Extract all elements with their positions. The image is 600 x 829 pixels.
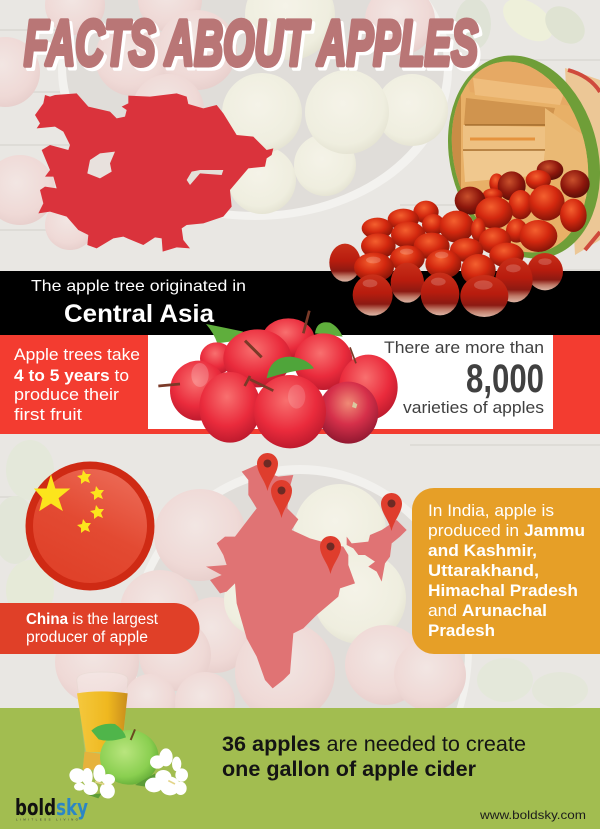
- logo: boldsky: LIMITLESS LIVING: [16, 818, 79, 822]
- pile of red apples: [329, 160, 590, 317]
- central apples illustration: [158, 311, 398, 448]
- callout: China: China is the largest: [26, 611, 159, 628]
- text: apple trees fruit time: first fruit: [14, 406, 82, 424]
- bushel basket: [448, 56, 600, 258]
- text: apple cider fact: 36 apples are needed to create: [222, 733, 526, 756]
- faded bowl of apples: top: [0, 0, 452, 250]
- text: 8,000 varieties: varieties of apples: [403, 398, 544, 417]
- callout: India states: Pradesh: [428, 622, 495, 640]
- green band: [0, 708, 600, 829]
- callout: India states: [412, 488, 600, 654]
- faded leaves: top right: [455, 0, 592, 51]
- text: central asia: [31, 278, 246, 328]
- text: central asia: The apple tree originated in: [31, 278, 246, 295]
- text: apple trees fruit time: Apple trees take: [14, 346, 140, 364]
- map pins: [257, 453, 402, 574]
- map: India: [206, 465, 407, 688]
- white panel: [148, 335, 553, 429]
- callout: India states: In India, apple is: [428, 502, 554, 520]
- text: 8,000 varieties: 8,000: [466, 357, 544, 401]
- red band: [0, 335, 600, 434]
- juice glass, green apple and blossoms: [67, 672, 188, 801]
- callout: China: producer of apple: [26, 629, 148, 646]
- text: apple trees fruit time: produce their: [14, 386, 120, 404]
- black band: [0, 271, 600, 335]
- text: apple trees fruit time: [14, 346, 140, 424]
- logo: boldsky: boldsky: [15, 796, 88, 821]
- callout: India states: and Kashmir,: [428, 542, 537, 560]
- text: 8,000 varieties: [384, 338, 544, 417]
- website url: www.boldsky.com: [479, 808, 586, 822]
- faded bowl of apples: bottom: [0, 440, 588, 829]
- callout: India states: Himachal Pradesh: [428, 582, 578, 600]
- text: apple cider fact: [222, 733, 526, 781]
- callout: China: [0, 603, 200, 654]
- text: central asia: Central Asia: [64, 300, 215, 328]
- text: 8,000 varieties: There are more than: [384, 338, 544, 357]
- text: apple cider fact: one gallon of apple cider: [222, 758, 476, 781]
- text: apple trees fruit time: 4 to 5 years to: [14, 367, 129, 385]
- callout: India states: produced in Jammu: [428, 522, 585, 540]
- callout: India states: and Arunachal: [428, 602, 547, 620]
- icon: China flag: [26, 462, 154, 590]
- map: Central Asia: [35, 93, 273, 252]
- callout: India states: Uttarakhand,: [428, 562, 539, 580]
